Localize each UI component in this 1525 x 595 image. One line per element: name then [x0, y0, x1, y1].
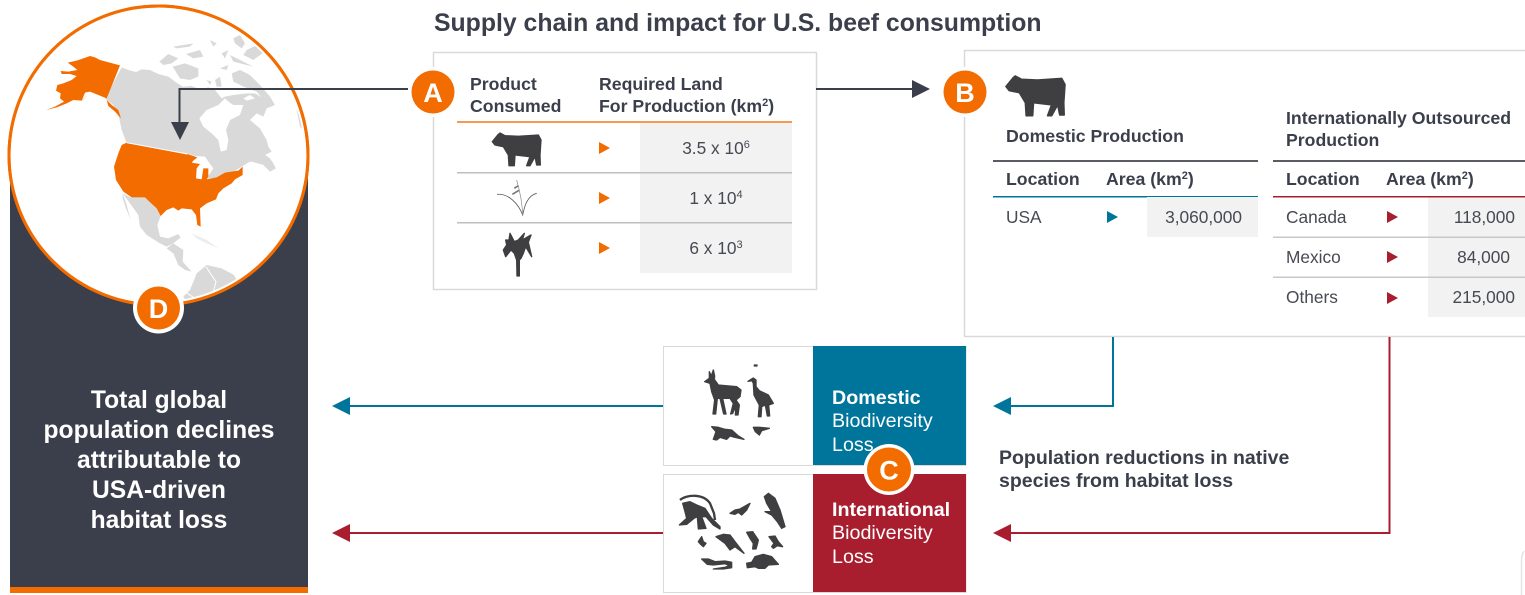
badge A: A — [423, 78, 443, 108]
badge C: C — [879, 456, 899, 486]
panel text: population declines — [44, 387, 274, 534]
arrow: A to B — [816, 80, 930, 98]
domestic production table: Domestic Production — [1006, 126, 1184, 146]
icon: cow — [492, 133, 541, 166]
panel: international biodiversity loss — [664, 474, 966, 592]
internationally outsourced production table: Internationally Outsourced — [1286, 108, 1511, 128]
internationally outsourced production table: ) — [1468, 169, 1474, 189]
table values: 4 — [736, 189, 743, 201]
internationally outsourced production table: Mexico — [1286, 247, 1341, 267]
internationally outsourced production table: Canada — [1286, 207, 1347, 227]
table headers: For Production (km — [599, 96, 762, 116]
panel text: population declines: population declines — [44, 417, 274, 444]
icon: grain plant — [497, 180, 537, 215]
arrow: international loss to total — [332, 524, 663, 542]
arrow: international production to biodiversity — [993, 337, 1390, 542]
internationally outsourced production table: 215,000 — [1453, 287, 1515, 307]
required land cells — [640, 123, 792, 273]
panel text: population declines: habitat loss — [91, 507, 227, 534]
title: Supply chain and impact for U.S. beef consumption — [434, 10, 1042, 37]
panel text: population declines: attributable to — [77, 447, 241, 474]
label: international biodiversity loss: Biodiversity — [832, 522, 933, 544]
badge B — [940, 67, 990, 117]
table arrows — [599, 142, 610, 254]
table values: 3.5 x 10 — [682, 138, 744, 158]
table values: 6 — [744, 139, 750, 151]
badge A — [408, 67, 458, 117]
table headers: 2 — [762, 97, 768, 109]
arrow: domestic production to biodiversity — [993, 337, 1113, 415]
badge D: D — [149, 294, 168, 324]
table values: 6 x 10 — [689, 238, 736, 258]
Canada and arctic islands — [105, 35, 308, 178]
label: international biodiversity loss — [832, 499, 950, 568]
internationally outsourced production table: 84,000 — [1457, 247, 1510, 267]
domestic production table: 2 — [1182, 170, 1188, 182]
table headers: ) — [768, 96, 774, 116]
panel: total global population declines — [10, 170, 308, 593]
panel text: population declines: USA-driven — [92, 477, 226, 504]
icon: palm tree — [503, 233, 532, 276]
icon: cow — [1006, 76, 1065, 116]
domestic production table — [993, 126, 1258, 237]
domestic production table: 3,060,000 — [1165, 207, 1242, 227]
map globe — [9, 6, 308, 307]
internationally outsourced production table — [1273, 108, 1525, 317]
table headers — [470, 74, 774, 116]
internationally outsourced production table: Production — [1286, 130, 1379, 150]
domestic production table: Area (km — [1106, 169, 1182, 189]
table headers: Consumed — [470, 96, 561, 116]
arrow: A to map — [171, 89, 408, 140]
internationally outsourced production table: 2 — [1462, 170, 1468, 182]
panel B: production tables — [964, 50, 1525, 336]
table headers: Product — [470, 74, 537, 94]
text: population reductions note: Population reductions in native — [999, 447, 1290, 469]
domestic production table: Location — [1006, 169, 1080, 189]
label: international biodiversity loss: International — [832, 499, 950, 521]
Alaska — [46, 56, 121, 118]
icon: domestic species — [705, 365, 773, 440]
internationally outsourced production table: 118,000 — [1454, 207, 1515, 227]
arrow: domestic loss to total — [332, 397, 663, 415]
label: domestic biodiversity loss: Loss — [832, 434, 874, 456]
domestic production table: ) — [1188, 169, 1194, 189]
badge C — [864, 444, 914, 495]
label: domestic biodiversity loss: Domestic — [832, 387, 921, 409]
label: domestic biodiversity loss: Biodiversity — [832, 410, 933, 432]
contiguous USA, Mexico, Central and South America — [114, 143, 243, 307]
internationally outsourced production table: Area (km — [1386, 169, 1462, 189]
panel: domestic biodiversity loss — [664, 346, 966, 466]
panel text: population declines: Total global — [91, 387, 227, 414]
table values: 3 — [736, 239, 743, 251]
internationally outsourced production table: Others — [1286, 287, 1338, 307]
text: population reductions note: species from habitat loss — [999, 470, 1233, 492]
table headers: Required Land — [599, 74, 723, 94]
text: population reductions note — [999, 447, 1290, 492]
table values: 1 x 10 — [689, 188, 736, 208]
label: international biodiversity loss: Loss — [832, 546, 874, 568]
internationally outsourced production table: Location — [1286, 169, 1360, 189]
badge B: B — [955, 78, 975, 108]
label: domestic biodiversity loss — [832, 387, 933, 456]
icon: international species — [679, 493, 785, 569]
table values — [682, 138, 750, 258]
domestic production table: USA — [1006, 207, 1042, 227]
panel A: product consumed table — [434, 52, 816, 290]
badge D — [133, 282, 184, 334]
